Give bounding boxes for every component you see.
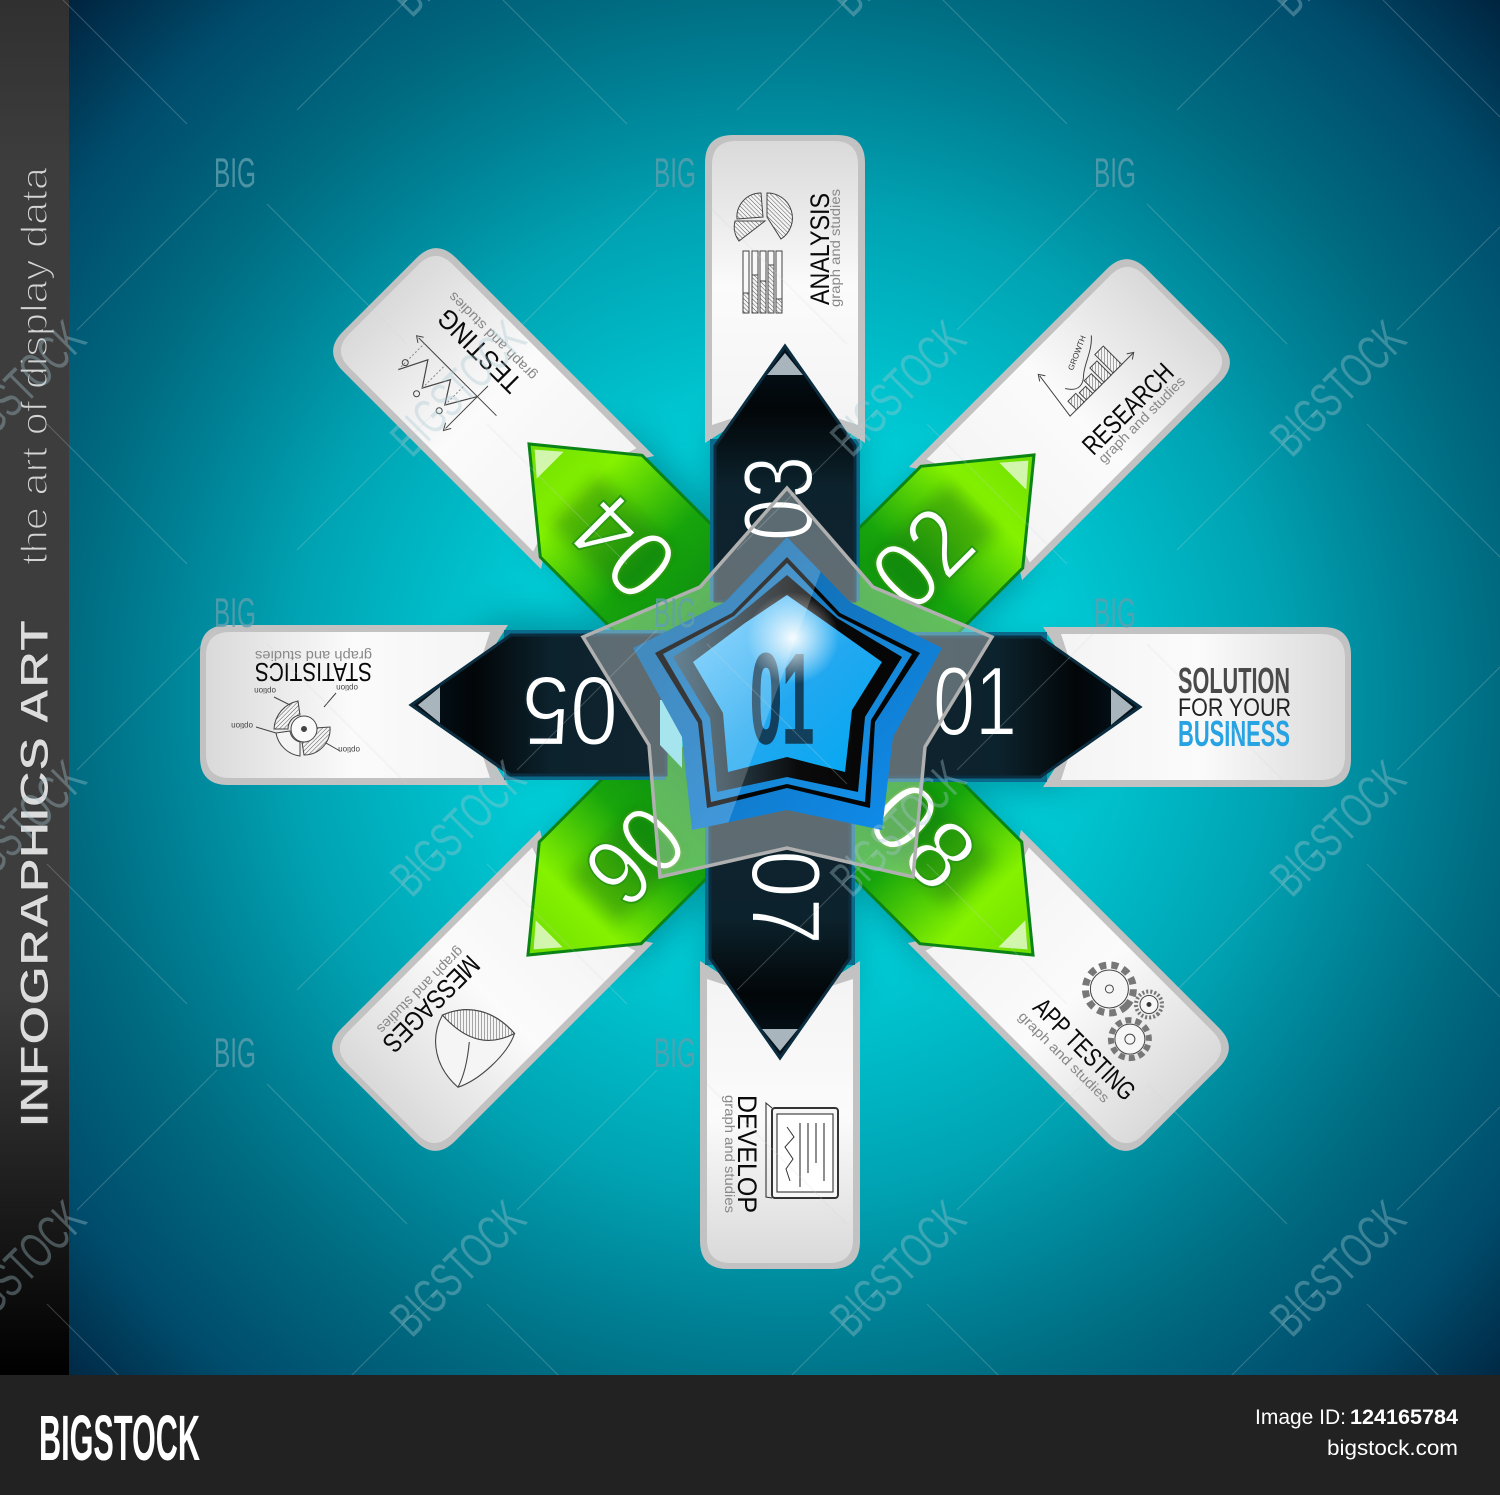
arrow: green 06 [477, 724, 759, 1006]
central blue star: 01 [750, 628, 814, 771]
icon: shield chart [414, 988, 519, 1093]
pale side glints [660, 700, 682, 768]
icon: gears [1064, 951, 1179, 1066]
watermarks: BIG [654, 589, 696, 636]
sidebar title: INFOGRAPHICS ART [13, 620, 57, 1127]
watermarks: BIGSTOCK [1260, 1190, 1416, 1346]
caption: research: graph and studies [1095, 373, 1188, 466]
number shadow [549, 474, 676, 601]
sidebar [0, 0, 69, 1375]
arrow: green 02 [803, 404, 1085, 686]
watermarks: BIG [214, 1029, 256, 1076]
arrow: dark 05 [411, 630, 666, 780]
watermarks: BIG [1094, 149, 1136, 196]
number 02: 02 [849, 485, 995, 631]
panel: app testing [908, 830, 1239, 1161]
arm 06 messages [322, 718, 765, 1161]
heading: statistics: STATISTICS [255, 657, 372, 687]
watermarks: BIGSTOCK [820, 1190, 976, 1346]
arrow: green 04 [478, 393, 760, 675]
watermarks: BIGSTOCK [820, 750, 976, 906]
arm 01 solution [885, 627, 1351, 787]
number shadow [868, 780, 996, 908]
glass star [583, 488, 992, 877]
footer site: bigstock.com [1327, 1437, 1458, 1460]
number 04: 04 [549, 473, 698, 621]
subheading: for your: FOR YOUR [1178, 694, 1291, 722]
icon: donut chart [231, 683, 360, 756]
caption: app testing: graph and studies [1015, 1008, 1113, 1106]
caption: messages: graph and studies [374, 944, 467, 1037]
icon: testing line chart [383, 325, 507, 450]
number shadow [568, 804, 688, 925]
watermarks: BIGSTOCK [1260, 750, 1416, 906]
panel: solution [1043, 627, 1351, 787]
panel: messages [322, 830, 653, 1161]
watermarks: BIG [654, 149, 696, 196]
watermarks: BIG [654, 1029, 696, 1076]
watermarks: BIGSTOCK [380, 1190, 536, 1346]
icon: browser window [766, 1103, 838, 1198]
footer image id number: 124165784 [1350, 1406, 1458, 1429]
number 06: 06 [564, 785, 707, 927]
icon: pie and bars [734, 193, 792, 313]
arm 02 research [797, 249, 1240, 692]
heading: messages: MESSAGES [377, 949, 486, 1058]
heading: develop: DEVELOP [732, 1095, 762, 1213]
arrow: dark 03 [710, 346, 860, 601]
number 08: 08 [846, 760, 998, 912]
panel: develop [700, 961, 860, 1269]
sidebar tagline: the art of display data [14, 167, 55, 565]
arrow: dark 07 [705, 803, 855, 1058]
arrow: dark 01 [885, 632, 1140, 782]
watermarks: BIGSTOCK [1260, 310, 1416, 466]
heading: app testing: APP TESTING [1027, 992, 1142, 1106]
heading: analysis: ANALYSIS [805, 193, 835, 305]
number shadow [870, 482, 997, 609]
icon: growth chart: GROWTH [1066, 334, 1088, 372]
watermarks: BIGSTOCK [380, 310, 536, 466]
watermarks: BIGSTOCK [820, 310, 976, 466]
caption: analysis: graph and studies [827, 189, 843, 307]
number 05: 05 [522, 656, 618, 766]
icon: donut chart: option [254, 686, 276, 695]
arrow: green 08 [802, 724, 1084, 1006]
arm 03 analysis [705, 135, 865, 601]
heading: solution: SOLUTION [1178, 660, 1290, 701]
icon: donut chart: option [231, 721, 253, 730]
watermarks: BIG [1094, 589, 1136, 636]
caption: testing: graph and studies [445, 289, 540, 384]
number 01: 01 [933, 646, 1017, 756]
arm drop shadows [411, 353, 1140, 1070]
watermarks: BIGSTOCK [380, 750, 536, 906]
heading: research: RESEARCH [1076, 357, 1180, 461]
caption: develop: graph and studies [722, 1095, 738, 1213]
footer: BIGSTOCK [39, 1402, 200, 1474]
star glow [747, 592, 839, 684]
number 03: 03 [723, 456, 833, 541]
heading: business: BUSINESS [1178, 713, 1290, 754]
caption: statistics: graph and studies [255, 648, 372, 664]
central blue star [620, 530, 942, 840]
star glass highlight [633, 537, 820, 830]
icon: donut chart: option [338, 745, 360, 754]
footer image id label: Image ID: [1255, 1406, 1346, 1429]
panel: research [909, 249, 1240, 580]
footer [0, 1375, 1500, 1495]
panel: statistics [200, 625, 508, 785]
panel: testing [323, 238, 654, 569]
panel: analysis [705, 135, 865, 443]
icon: donut chart: option [336, 683, 358, 692]
watermarks: BIG [214, 149, 256, 196]
heading: testing: TESTING [431, 303, 528, 399]
icon: growth chart [1033, 316, 1137, 419]
arm 04 testing [323, 238, 766, 681]
arm 05 statistics [200, 625, 666, 785]
arm 08 app testing [796, 718, 1239, 1161]
number 07: 07 [731, 850, 841, 945]
arm 07 develop [700, 803, 860, 1269]
watermarks: BIG [214, 589, 256, 636]
